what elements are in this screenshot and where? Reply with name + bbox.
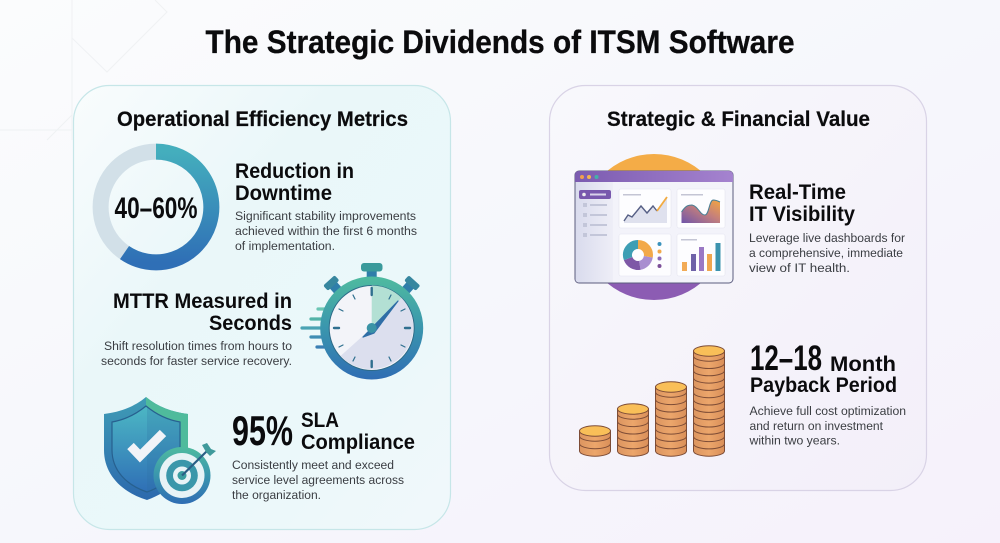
text: reduction in downtime: Significant stability improvements (235, 209, 416, 223)
text: MTTR measured in seconds (101, 290, 292, 368)
icon: check mark (130, 433, 163, 456)
text: MTTR measured in seconds: seconds for faster service recovery. (101, 354, 292, 368)
icon: target (154, 443, 216, 504)
text: real-time IT visibility: Leverage live dashboards for (749, 231, 905, 245)
text: MTTR measured in seconds: Seconds (209, 312, 292, 335)
panel: operational efficiency metrics (74, 86, 450, 530)
text: 95% SLA compliance: SLA (301, 409, 339, 432)
text: 12–18 month payback period: Achieve full cost optimization (750, 404, 906, 418)
text: 95% SLA compliance: 95% (232, 407, 293, 454)
icon: dashboard window (575, 154, 733, 300)
heading: strategic value: Strategic & Financial Value (607, 108, 870, 131)
text: reduction in downtime (235, 160, 417, 253)
text: 12–18 month payback period: and return on investment (750, 419, 884, 433)
donut chart: 40–60%: 40–60% (114, 192, 198, 225)
text: real-time IT visibility: a comprehensive, immediate (749, 246, 903, 260)
icon: shield with target (104, 397, 216, 504)
text: real-time IT visibility: Real-Time (749, 181, 846, 204)
text: 95% SLA compliance (232, 407, 415, 502)
text: reduction in downtime: of implementation. (235, 239, 335, 253)
icon: coin stacks (580, 346, 724, 456)
donut chart: 40–60% (101, 152, 211, 262)
text: real-time IT visibility (749, 181, 905, 275)
text: 12–18 month payback period: 12–18 (750, 339, 822, 378)
coin stack 1 (580, 426, 610, 456)
text: MTTR measured in seconds: MTTR Measured in (113, 290, 292, 313)
text: 12–18 month payback period: Month (830, 352, 896, 376)
text: 95% SLA compliance: the organization. (232, 488, 321, 502)
coin stack 4 (694, 346, 724, 456)
heading: operational efficiency: Operational Efficiency Metrics (117, 108, 408, 131)
title: The Strategic Dividends of ITSM Software (206, 24, 794, 60)
coin stack 2 (618, 404, 648, 456)
text: 12–18 month payback period (748, 339, 906, 448)
icon: stopwatch (302, 263, 423, 380)
text: 12–18 month payback period: within two years. (748, 434, 840, 448)
text: reduction in downtime: achieved within the first 6 months (235, 224, 417, 238)
text: 95% SLA compliance: service level agreements across (232, 473, 404, 487)
text: 12–18 month payback period: Payback Period (750, 373, 897, 397)
coin stack 3 (656, 382, 686, 456)
text: real-time IT visibility: view of IT health. (749, 261, 850, 275)
text: 95% SLA compliance: Compliance (301, 431, 415, 454)
panel: strategic and financial value (550, 86, 926, 490)
text: reduction in downtime: Reduction in (235, 160, 354, 183)
text: real-time IT visibility: IT Visibility (749, 203, 855, 226)
text: MTTR measured in seconds: Shift resolution times from hours to (104, 339, 292, 353)
text: 95% SLA compliance: Consistently meet and exceed (232, 458, 394, 472)
text: reduction in downtime: Downtime (235, 182, 332, 205)
